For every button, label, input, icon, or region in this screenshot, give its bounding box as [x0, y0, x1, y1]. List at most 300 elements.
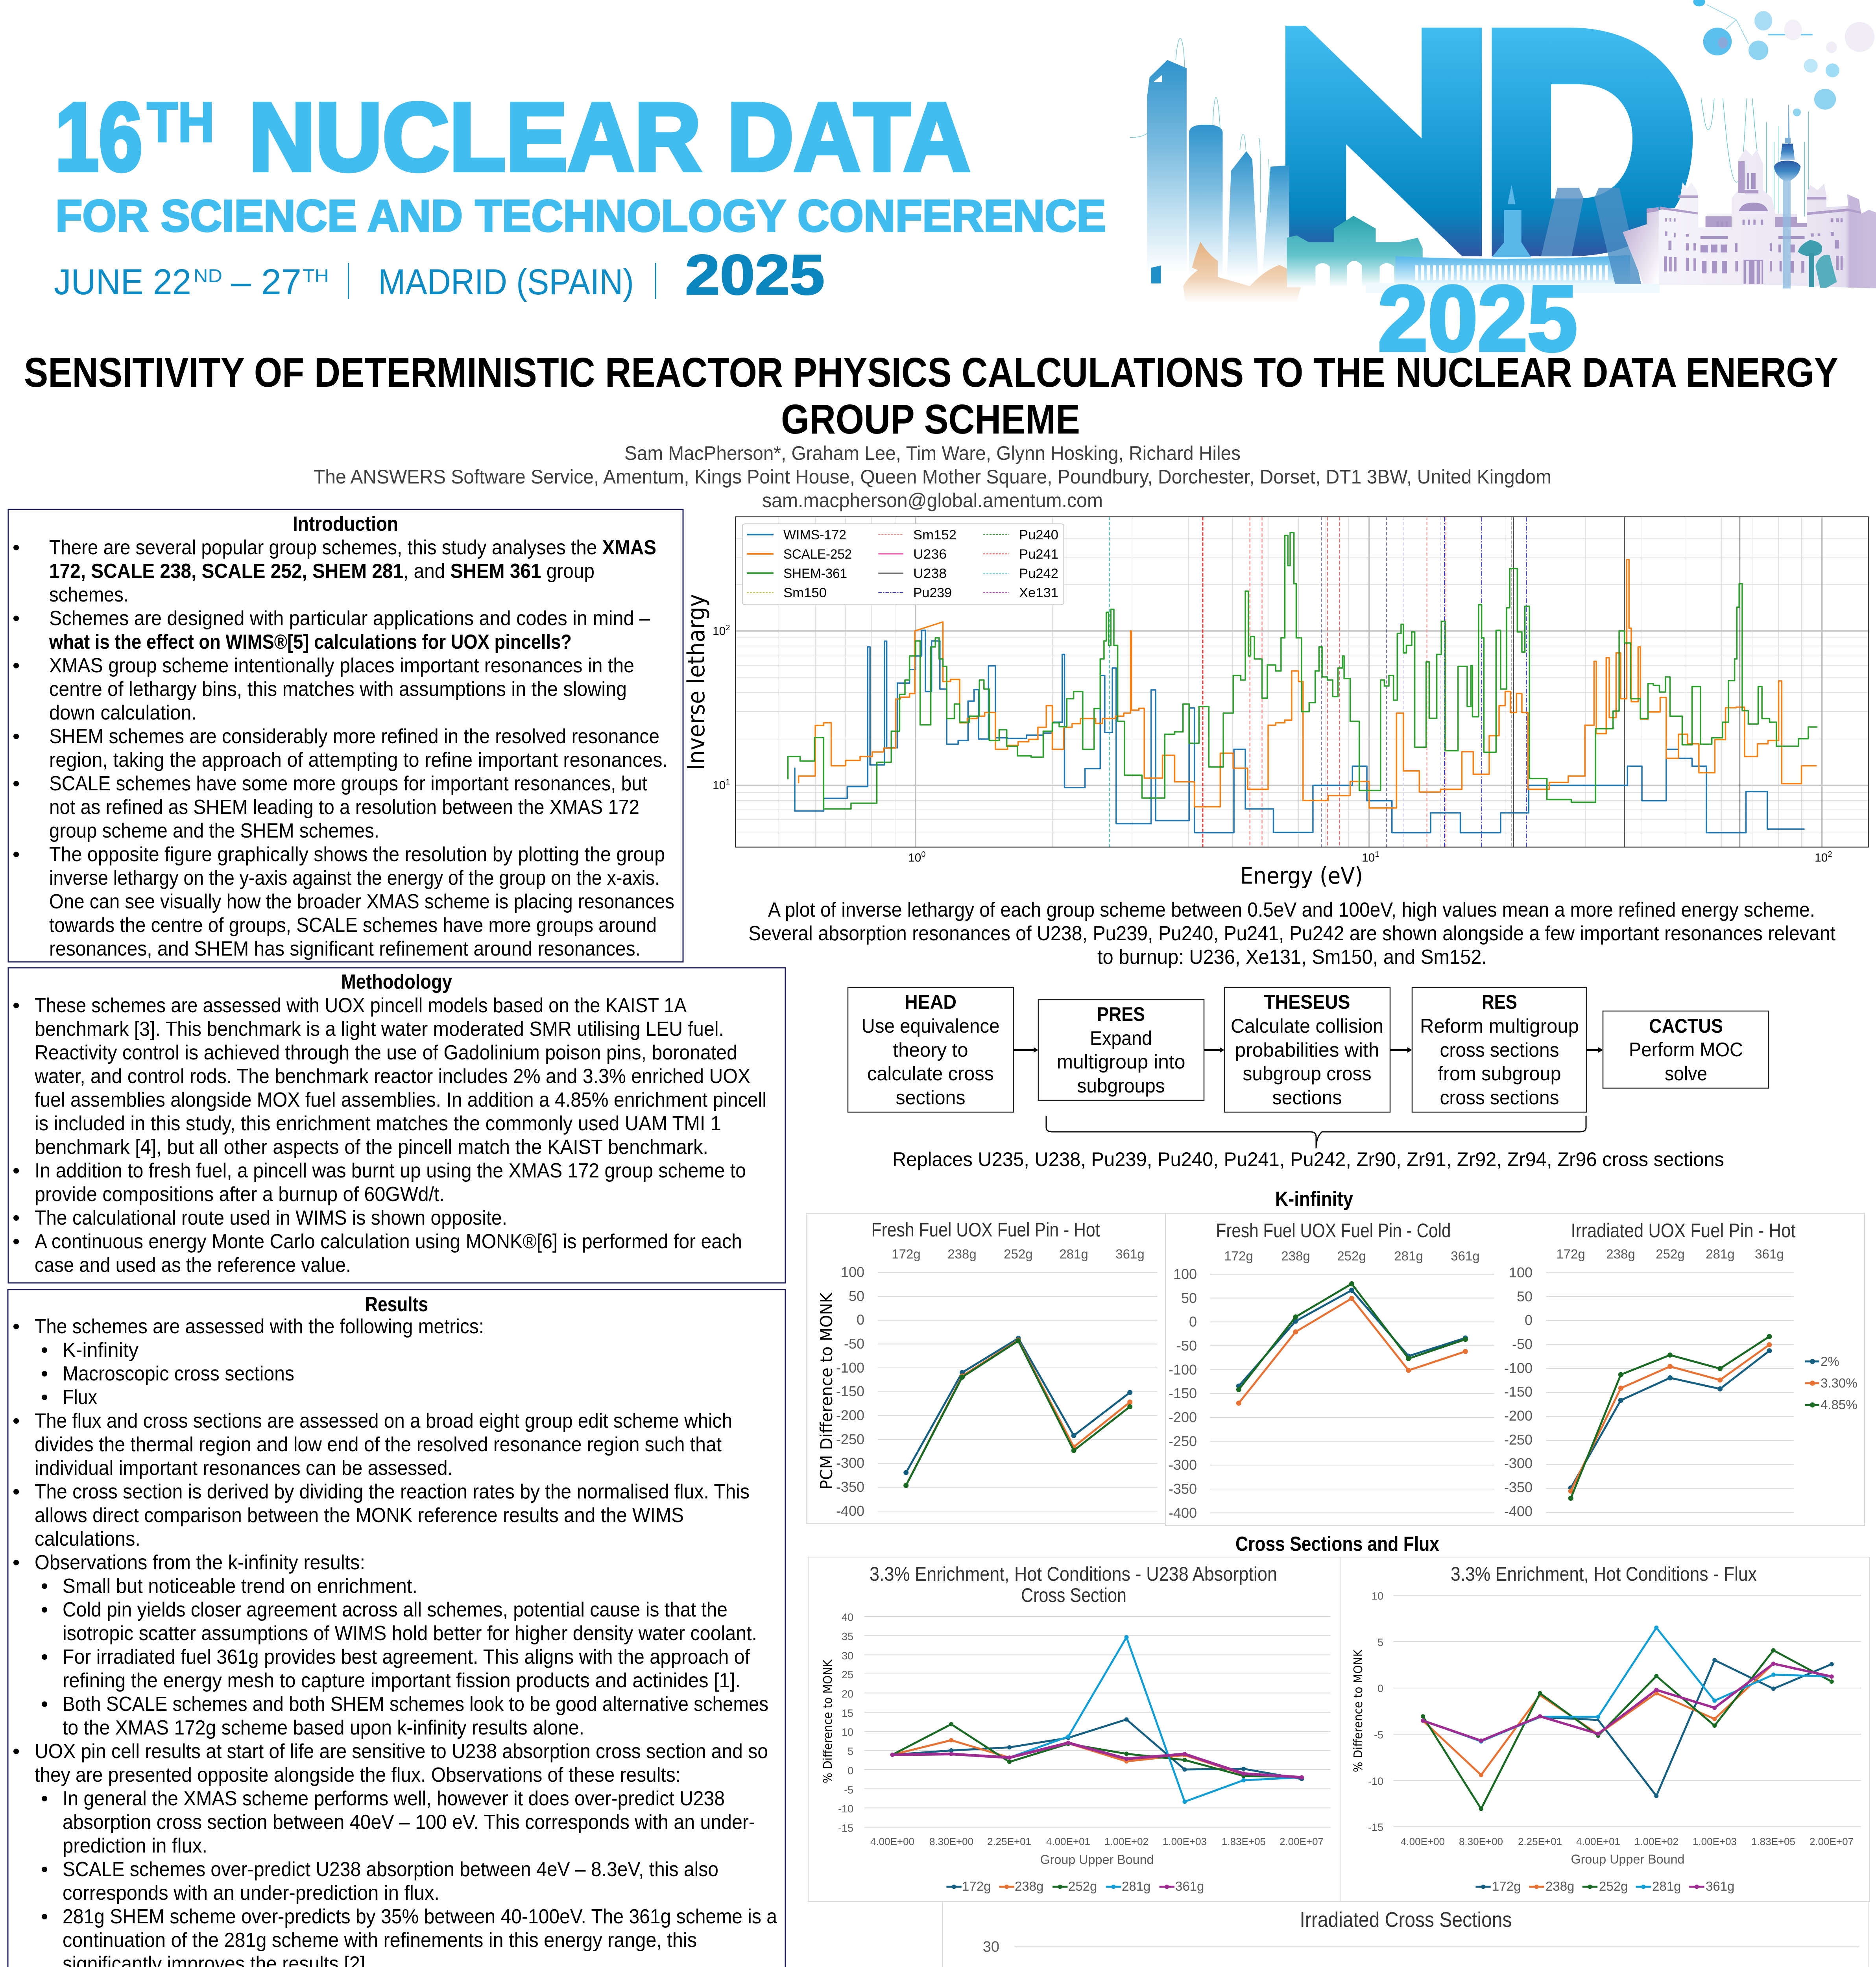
conference date and place: ND: [194, 265, 222, 286]
box: HEAD: theory to: [893, 1039, 968, 1061]
text block: results bullets: The cross section is derived by dividing the reaction rates by the normalised flux. This: [35, 1480, 750, 1503]
chart: U238 absorption cross section: -10: [838, 1803, 853, 1815]
conference title: 16th Nuclear Data: NUCLEAR DATA: [249, 83, 970, 191]
chart legend labels: Pu240: [1019, 528, 1058, 542]
flow diagram: WIMS route: [848, 987, 1769, 1170]
chart: fresh fuel cold: -350: [1169, 1481, 1197, 1497]
chart: flux: 1.00E+02: [1634, 1836, 1678, 1847]
text block: introduction bullets: •: [13, 654, 20, 677]
text block: introduction bullets: There are several popular group schemes, this study analyses the XMAS: [49, 536, 656, 559]
panel: cross section and flux charts: [808, 1557, 1869, 1902]
text block: results bullets: to the XMAS 172g scheme based upon k-infinity results alone.: [63, 1716, 584, 1739]
text block: methodology bullets: provide compositions after a burnup of 60GWd/t.: [35, 1183, 445, 1206]
chart: U238 absorption cross section: 30: [842, 1650, 853, 1662]
chart axis ticks: 10: [713, 625, 726, 638]
conference date and place: JUNE 22: [54, 262, 191, 302]
box: HEAD: HEAD: [905, 991, 956, 1013]
box: RES: cross sections: [1440, 1087, 1559, 1109]
chart: flux: 8.30E+00: [1459, 1836, 1503, 1847]
box: CACTUS: [1603, 1011, 1769, 1088]
chart: flux: -10: [1368, 1775, 1383, 1787]
chart: irradiated hot: -50: [1512, 1336, 1533, 1352]
text block: results bullets: continuation of the 281g scheme with refinements in this energy range, this: [63, 1929, 697, 1952]
chart: fresh fuel hot: 361g: [1115, 1247, 1145, 1261]
chart: U238 absorption cross section: 281g: [1122, 1879, 1150, 1893]
chart: fresh fuel hot: 172g: [892, 1247, 921, 1261]
text block: results bullets: absorption cross section between 40eV – 100 eV. This corresponds with an under-: [63, 1811, 755, 1834]
text block: methodology bullets: [13, 994, 766, 1277]
chart: fresh fuel cold: 361g: [1451, 1249, 1480, 1263]
text block: methodology bullets: •: [13, 1207, 20, 1229]
chart axis ticks: [713, 624, 1832, 864]
icon: colonnade and monument: [1366, 185, 1660, 293]
text block: introduction bullets: down calculation.: [49, 701, 197, 724]
text block: results bullets: 281g SHEM scheme over-predicts by 35% between 40-100eV. The 361g scheme is a: [63, 1905, 777, 1928]
icon: Torrespana tower: [1774, 105, 1800, 288]
text block: results bullets: corresponds with an under-prediction in flux.: [63, 1882, 439, 1904]
panel: introduction: [8, 509, 683, 962]
text block: results bullets: •: [41, 1598, 48, 1621]
chart legend labels: [783, 528, 1058, 600]
chart: fresh fuel hot: -250: [836, 1431, 864, 1447]
chart: flux: 1.83E+05: [1751, 1836, 1795, 1847]
text block: results bullets: calculations.: [35, 1528, 140, 1550]
text block: results bullets: Observations from the k-infinity results:: [35, 1551, 365, 1574]
heading: k-infinity: K-infinity: [1275, 1188, 1353, 1210]
box: THESEUS: THESEUS: [1264, 991, 1350, 1013]
brace caption: Replaces U235, U238, Pu239, Pu240, Pu241, Pu242, Zr90, Zr91, Zr92, Zr94, Zr96 cross sections: [892, 1148, 1724, 1170]
text block: results bullets: •: [13, 1480, 20, 1503]
text block: results bullets: •: [41, 1386, 48, 1409]
chart: irradiated hot: 281g: [1706, 1247, 1735, 1261]
heading: introduction: Introduction: [293, 513, 398, 535]
text block: introduction bullets: •: [13, 607, 20, 630]
box: CACTUS: CACTUS: [1649, 1015, 1723, 1037]
chart axis ticks: 10: [1362, 851, 1375, 864]
icon: skyscrapers: [1130, 38, 1289, 284]
text block: introduction bullets: •: [13, 843, 20, 866]
box: PRES: PRES: [1097, 1003, 1145, 1025]
chart: flux: 2.00E+07: [1810, 1836, 1854, 1847]
chart: fresh fuel hot: -100: [836, 1360, 864, 1376]
icon: thin spectrum curves: [1701, 98, 1808, 223]
chart: fresh fuel cold: 0: [1189, 1314, 1197, 1330]
chart: U238 absorption cross section: 361g: [1175, 1879, 1204, 1893]
chart: fresh fuel hot: -150: [836, 1383, 864, 1399]
chart: U238 absorption cross section: Group Upper Bound: [1040, 1853, 1154, 1867]
chart: U238 absorption cross section: 172g: [962, 1879, 991, 1893]
chart: irradiated hot: Irradiated UOX Fuel Pin - Hot: [1571, 1220, 1796, 1242]
chart: irradiated hot: -350: [1504, 1479, 1533, 1495]
icon: rocks: [1183, 242, 1302, 303]
chart: fresh fuel hot: 50: [849, 1288, 864, 1304]
chart: inverse lethargy vs energy: [683, 517, 1868, 889]
text block: methodology bullets: •: [13, 1230, 20, 1253]
chart: fresh fuel cold: 252g: [1337, 1249, 1366, 1263]
chart: flux: 2.25E+01: [1518, 1836, 1562, 1847]
text block: results bullets: •: [41, 1362, 48, 1385]
text block: results bullets: Flux: [63, 1386, 97, 1409]
box: RES: cross sections: [1440, 1039, 1559, 1061]
panel: irradiated cross sections chart: [943, 1902, 1868, 1967]
box: RES: Reform multigroup: [1420, 1015, 1579, 1037]
text block: methodology bullets: case and used as the reference value.: [35, 1254, 351, 1277]
text block: results bullets: K-infinity: [63, 1339, 138, 1362]
conference date and place: 2025: [685, 243, 825, 306]
chart: U238 absorption cross section: 5: [848, 1746, 853, 1757]
logo year: 2025: [1378, 267, 1577, 371]
text block: introduction bullets: group scheme and the SHEM schemes.: [49, 819, 379, 842]
chart axis titles: Inverse lethargy: [683, 594, 710, 770]
chart: fresh fuel cold: Fresh Fuel UOX Fuel Pin - Cold: [1216, 1220, 1451, 1242]
text block: results bullets: Both SCALE schemes and both SHEM schemes look to be good alternative schemes: [63, 1693, 768, 1716]
text block: results bullets: they are presented opposite alongside the flux. Observations of these results:: [35, 1764, 681, 1786]
text block: results bullets: •: [13, 1551, 20, 1574]
box: CACTUS: solve: [1665, 1063, 1707, 1085]
text block: methodology bullets: These schemes are assessed with UOX pincell models based on the KAIST 1A: [35, 994, 687, 1017]
chart legend labels: U238: [913, 566, 947, 581]
chart: irradiated hot: 0: [1525, 1312, 1533, 1328]
box: CACTUS: Perform MOC: [1629, 1039, 1743, 1061]
text block: results bullets: •: [13, 1315, 20, 1338]
chart: U238 absorption cross section: 4.00E+00: [870, 1836, 914, 1847]
box: HEAD: sections: [896, 1087, 966, 1109]
chart: fresh fuel hot: 281g: [1059, 1247, 1088, 1261]
chart: fresh fuel hot: 238g: [947, 1247, 977, 1261]
chart: fresh fuel cold: -200: [1169, 1409, 1197, 1425]
text block: results bullets: Cold pin yields closer agreement across all schemes, potential cause is that the: [63, 1598, 728, 1621]
chart: U238 absorption cross section: 8.30E+00: [929, 1836, 973, 1847]
box: PRES: Expand: [1090, 1027, 1152, 1049]
chart: flux: 238g: [1545, 1879, 1574, 1893]
text block: results bullets: divides the thermal region and low end of the resolved resonance region such that: [35, 1433, 722, 1456]
chart: flux: 3.3% Enrichment, Hot Conditions - Flux: [1451, 1563, 1757, 1585]
text block: results bullets: Small but noticeable trend on enrichment.: [63, 1575, 417, 1598]
chart: irradiated hot: 100: [1509, 1264, 1533, 1281]
panel: results: [8, 1290, 785, 1967]
chart: irradiated hot: 238g: [1606, 1247, 1635, 1261]
chart axis ticks: 10: [908, 851, 921, 864]
line series: [1014, 1946, 1859, 1967]
text block: methodology bullets: •: [13, 994, 20, 1017]
chart axis titles: [683, 594, 1363, 889]
text block: methodology bullets: •: [13, 1159, 20, 1182]
chart: fresh fuel hot: 0: [857, 1312, 864, 1328]
chart: U238 absorption cross section: 35: [842, 1631, 853, 1642]
panel: k-infinity charts: [806, 1213, 1865, 1526]
box: HEAD: calculate cross: [867, 1063, 994, 1085]
text block: introduction bullets: •: [13, 725, 20, 748]
icon: bear and tree statue: [1798, 240, 1837, 288]
chart: fresh fuel hot: 100: [841, 1264, 864, 1280]
chart: fresh fuel cold: 281g: [1394, 1249, 1423, 1263]
chart: flux: 252g: [1599, 1879, 1628, 1893]
chart: fresh fuel hot: 252g: [1004, 1247, 1033, 1261]
chart: fresh fuel hot: -50: [844, 1336, 864, 1352]
box: PRES: subgroups: [1077, 1075, 1165, 1097]
chart: flux: Group Upper Bound: [1571, 1852, 1685, 1866]
text block: results bullets: For irradiated fuel 361g provides best agreement. This aligns with the approach of: [63, 1646, 750, 1668]
chart: U238 absorption cross section: 20: [842, 1688, 853, 1700]
chart legend labels: Pu239: [913, 585, 952, 600]
chart: flux: [1352, 1563, 1861, 1893]
chart: U238 absorption cross section: [821, 1563, 1331, 1893]
chart: fresh fuel cold: -100: [1169, 1362, 1197, 1378]
icon: molecules: [1693, 0, 1874, 116]
panel: methodology: [8, 968, 785, 1283]
text block: methodology bullets: benchmark [4], but all other aspects of the pincell match the KAIST benchmark.: [35, 1136, 708, 1159]
text block: introduction bullets: not as refined as SHEM leading to a resolution between the XMAS 172: [49, 796, 639, 819]
chart: U238 absorption cross section: -5: [844, 1784, 853, 1796]
text block: results bullets: •: [41, 1905, 48, 1928]
text block: introduction bullets: towards the centre of groups, SCALE schemes have more groups around: [49, 914, 657, 937]
chart: flux: 1.00E+03: [1693, 1836, 1737, 1847]
chart: flux: 0: [1377, 1683, 1383, 1694]
chart: fresh fuel cold: [1169, 1220, 1494, 1521]
text block: methodology bullets: Reactivity control is achieved through the use of Gadolinium poison pins, boronated: [35, 1041, 737, 1064]
box: RES: RES: [1482, 991, 1517, 1013]
chart: fresh fuel cold: -250: [1169, 1433, 1197, 1449]
text block: methodology bullets: A continuous energy Monte Carlo calculation using MONK®[6] is performed for each: [35, 1230, 742, 1253]
box: HEAD: Use equivalence: [862, 1015, 999, 1037]
chart: U238 absorption cross section: 4.00E+01: [1046, 1836, 1090, 1847]
text block: results bullets: In general the XMAS scheme performs well, however it does over-predict U238: [63, 1787, 725, 1810]
chart: fresh fuel cold: -400: [1169, 1505, 1197, 1521]
chart: U238 absorption cross section: 1.00E+03: [1163, 1836, 1207, 1847]
chart legend labels: SHEM-361: [783, 566, 847, 581]
chart caption: [748, 899, 1836, 969]
text block: methodology bullets: water, and control rods. The benchmark reactor includes 2% and 3.3% enriched UOX: [34, 1065, 750, 1088]
text block: methodology bullets: The calculational route used in WIMS is shown opposite.: [35, 1207, 507, 1229]
text block: results bullets: prediction in flux.: [63, 1834, 207, 1857]
icon: leaning towers: [1541, 188, 1641, 284]
conference date and place: [54, 243, 825, 306]
chart: irradiated hot: 172g: [1556, 1247, 1585, 1261]
chart: flux: -15: [1368, 1821, 1383, 1833]
box: THESEUS: subgroup cross: [1243, 1063, 1372, 1085]
authors and affiliation: Sam MacPherson*, Graham Lee, Tim Ware, Glynn Hosking, Richard Hiles: [624, 442, 1241, 464]
icon: Puerta de Alcala gate: [1287, 216, 1423, 287]
text block: results bullets: •: [13, 1740, 20, 1763]
box: PRES: [1038, 1000, 1204, 1100]
chart: U238 absorption cross section: 252g: [1068, 1879, 1097, 1893]
chart: U238 absorption cross section: 10: [842, 1726, 853, 1738]
text block: results bullets: •: [41, 1693, 48, 1716]
chart: U238 absorption cross section: 0: [848, 1765, 853, 1777]
text block: results bullets: •: [41, 1339, 48, 1362]
chart title: Irradiated Cross Sections: [1300, 1908, 1512, 1932]
chart: U238 absorption cross section: 1.83E+05: [1222, 1836, 1266, 1847]
y axis labels: 30: [983, 1939, 999, 1955]
text block: methodology bullets: fuel assemblies alongside MOX fuel assemblies. In addition a 4.85% enrichment pincell: [35, 1089, 766, 1111]
chart: irradiated hot: 2%: [1821, 1354, 1839, 1369]
chart: flux: 281g: [1652, 1879, 1681, 1893]
text block: introduction bullets: region, taking the approach of attempting to refine important resonances.: [49, 749, 668, 771]
chart axis titles: Energy (eV): [1240, 862, 1363, 889]
text block: introduction bullets: •: [13, 772, 20, 795]
chart: flux: 4.00E+01: [1576, 1836, 1620, 1847]
authors and affiliation: The ANSWERS Software Service, Amentum, Kings Point House, Queen Mother Square, Poundbury, Dorchester, Dorset, DT1 3BW, United Kingdom: [314, 466, 1551, 488]
heading: methodology: Methodology: [341, 971, 452, 993]
authors and affiliation: [314, 442, 1551, 511]
box: THESEUS: probabilities with: [1235, 1039, 1379, 1061]
chart: irradiated hot: [1504, 1220, 1858, 1519]
text block: results bullets: allows direct comparison between the MONK reference results and the WIMS: [35, 1504, 684, 1527]
chart: fresh fuel cold: 100: [1173, 1266, 1197, 1282]
chart axis ticks: 1: [1375, 850, 1379, 859]
chart: irradiated hot: -400: [1504, 1503, 1533, 1519]
text block: introduction bullets: One can see visually how the broader XMAS scheme is placing resonances: [49, 890, 674, 913]
chart: U238 absorption cross section: 40: [842, 1611, 853, 1623]
text block: results bullets: •: [41, 1646, 48, 1668]
text block: introduction bullets: 172, SCALE 238, SCALE 252, SHEM 281, and SHEM 361 group: [49, 560, 595, 583]
conference date and place: – 27: [231, 262, 301, 302]
icon: Cibeles palace: [1623, 149, 1876, 288]
chart: U238 absorption cross section: Cross Section: [1021, 1584, 1126, 1606]
text block: introduction bullets: Schemes are designed with particular applications and codes in mind –: [49, 607, 650, 630]
text block: methodology bullets: In addition to fresh fuel, a pincell was burnt up using the XMAS 172 group scheme to: [35, 1159, 746, 1182]
text block: introduction bullets: resonances, and SHEM has significant refinement around resonances.: [49, 937, 641, 960]
chart legend labels: Sm150: [783, 585, 827, 600]
conference date and place: TH: [303, 265, 329, 286]
icon: N D letters: [1285, 26, 1693, 256]
chart: flux: 5: [1377, 1637, 1383, 1648]
chart: flux: % Difference to MONK: [1352, 1649, 1365, 1772]
chart: irradiated hot: -100: [1504, 1360, 1533, 1376]
text block: introduction bullets: centre of lethargy bins, this matches with assumptions in the slowing: [49, 678, 627, 701]
chart: irradiated hot: 252g: [1656, 1247, 1685, 1261]
text block: introduction bullets: inverse lethargy on the y-axis against the energy of the group on the x-axis.: [49, 867, 660, 889]
chart legend labels: WIMS-172: [783, 528, 846, 542]
text block: results bullets: The schemes are assessed with the following metrics:: [35, 1315, 484, 1338]
text block: methodology bullets: is included in this study, this enrichment matches the commonly used UAM TMI 1: [35, 1112, 721, 1135]
conference date and place: MADRID (SPAIN): [378, 262, 634, 302]
chart: irradiated hot: -300: [1504, 1455, 1533, 1471]
text block: results bullets: •: [41, 1575, 48, 1598]
box: RES: [1412, 987, 1586, 1112]
chart: U238 absorption cross section: 1.00E+02: [1104, 1836, 1148, 1847]
text block: results bullets: isotropic scatter assumptions of WIMS hold better for higher density water coolant.: [63, 1622, 757, 1645]
box: THESEUS: [1224, 987, 1390, 1112]
chart caption: to burnup: U236, Xe131, Sm150, and Sm152.: [1097, 946, 1487, 969]
chart: U238 absorption cross section: % Difference to MONK: [821, 1659, 835, 1783]
chart: irradiated hot: 50: [1517, 1288, 1533, 1305]
chart axis ticks: 10: [713, 779, 726, 792]
chart axis ticks: 10: [1815, 851, 1828, 864]
text block: introduction bullets: The opposite figure graphically shows the resolution by plotting the group: [49, 843, 665, 866]
text block: introduction bullets: XMAS group scheme intentionally places important resonances in the: [49, 654, 634, 677]
chart: fresh fuel hot: -350: [836, 1479, 864, 1495]
text block: results bullets: UOX pin cell results at start of life are sensitive to U238 absorption cross section and so: [35, 1740, 768, 1763]
chart: fresh fuel cold: -50: [1176, 1338, 1197, 1354]
chart: flux: 172g: [1492, 1879, 1521, 1893]
chart legend labels: U236: [913, 547, 947, 562]
authors and affiliation: sam.macpherson@global.amentum.com: [762, 489, 1103, 511]
chart: U238 absorption cross section: 25: [842, 1669, 853, 1681]
chart: U238 absorption cross section: 3.3% Enrichment, Hot Conditions - U238 Absorption: [870, 1563, 1277, 1585]
text block: results bullets: The flux and cross sections are assessed on a broad eight group edit scheme which: [35, 1410, 732, 1432]
chart: U238 absorption cross section: 2.00E+07: [1280, 1836, 1324, 1847]
chart: U238 absorption cross section: 15: [842, 1707, 853, 1719]
text block: results bullets: •: [41, 1858, 48, 1881]
text block: results bullets: SCALE schemes over-predict U238 absorption between 4eV – 8.3eV, this also: [63, 1858, 718, 1881]
conference title: 16th Nuclear Data: TH: [147, 90, 214, 154]
poster title: GROUP SCHEME: [781, 396, 1080, 443]
chart legend labels: Xe131: [1019, 585, 1058, 600]
chart: irradiated hot: -200: [1504, 1408, 1533, 1424]
chart: fresh fuel cold: 238g: [1281, 1249, 1310, 1263]
conference subtitle: FOR SCIENCE AND TECHNOLOGY CONFERENCE: [55, 191, 1106, 241]
chart: irradiated hot: 4.85%: [1821, 1397, 1858, 1412]
conference logo: ND Madrid skyline: [1130, 0, 1876, 303]
chart: U238 absorption cross section: 2.25E+01: [987, 1836, 1031, 1847]
chart: fresh fuel cold: 172g: [1224, 1249, 1253, 1263]
heading: results: Results: [365, 1293, 428, 1316]
chart: U238 absorption cross section: -15: [838, 1822, 853, 1834]
chart: fresh fuel hot: -200: [836, 1407, 864, 1423]
chart: irradiated hot: 3.30%: [1821, 1376, 1858, 1390]
chart: irradiated hot: 361g: [1755, 1247, 1784, 1261]
text block: results bullets: Macroscopic cross sections: [63, 1362, 294, 1385]
chart: fresh fuel hot: -400: [836, 1503, 864, 1519]
chart: U238 absorption cross section: 238g: [1015, 1879, 1043, 1893]
chart: fresh fuel hot: [817, 1219, 1157, 1519]
chart: fresh fuel hot: -300: [836, 1455, 864, 1471]
chart: irradiated hot: -150: [1504, 1384, 1533, 1400]
chart: fresh fuel cold: -150: [1169, 1385, 1197, 1401]
text block: results bullets: •: [41, 1787, 48, 1810]
chart: flux: 10: [1372, 1590, 1383, 1602]
chart legend labels: Pu241: [1019, 547, 1058, 562]
poster title: [24, 349, 1838, 443]
text block: introduction bullets: SHEM schemes are considerably more refined in the resolved resonance: [49, 725, 659, 748]
text block: methodology bullets: benchmark [3]. This benchmark is a light water moderated SMR utilising LEU fuel.: [35, 1018, 724, 1041]
chart: fresh fuel hot: Fresh Fuel UOX Fuel Pin - Hot: [871, 1219, 1100, 1241]
text block: introduction bullets: SCALE schemes have some more groups for important resonances, but: [49, 772, 647, 795]
text block: results bullets: •: [13, 1410, 20, 1432]
text block: results bullets: individual important resonances can be assessed.: [35, 1457, 453, 1480]
heading: cross sections and flux: Cross Sections and Flux: [1235, 1533, 1439, 1556]
chart: flux: -5: [1374, 1729, 1383, 1741]
chart caption: A plot of inverse lethargy of each group scheme between 0.5eV and 100eV, high values mean a more refined energy scheme.: [768, 899, 1815, 921]
conference title: 16th Nuclear Data: 16: [55, 83, 142, 191]
arrows between steps: [1014, 1047, 1603, 1053]
text block: results bullets: refining the energy mesh to capture important fission products and actinides [1].: [63, 1669, 740, 1692]
chart legend labels: Pu242: [1019, 566, 1058, 581]
text block: introduction bullets: [13, 536, 674, 960]
chart: flux: 4.00E+00: [1401, 1836, 1445, 1847]
chart legend labels: SCALE-252: [783, 547, 852, 562]
chart axis ticks: 0: [921, 850, 925, 859]
box: PRES: multigroup into: [1057, 1051, 1185, 1073]
box: RES: from subgroup: [1438, 1063, 1561, 1085]
box: THESEUS: Calculate collision: [1231, 1015, 1383, 1037]
chart: fresh fuel hot: PCM Difference to MONK: [817, 1292, 836, 1489]
chart axis ticks: 1: [726, 778, 730, 786]
brace under steps: [1046, 1116, 1586, 1148]
chart: irradiated hot: -250: [1504, 1432, 1533, 1448]
text block: introduction bullets: what is the effect on WIMS®[5] calculations for UOX pincells?: [49, 631, 572, 653]
chart axis ticks: 2: [1828, 850, 1832, 859]
text block: introduction bullets: schemes.: [49, 583, 129, 606]
text block: introduction bullets: •: [13, 536, 20, 559]
chart: flux: 361g: [1706, 1879, 1734, 1893]
text block: results bullets: [13, 1315, 777, 1967]
chart legend labels: Sm152: [913, 528, 956, 542]
chart axis ticks: 2: [726, 624, 730, 632]
chart: fresh fuel cold: 50: [1181, 1290, 1197, 1306]
box: HEAD: [848, 987, 1014, 1112]
